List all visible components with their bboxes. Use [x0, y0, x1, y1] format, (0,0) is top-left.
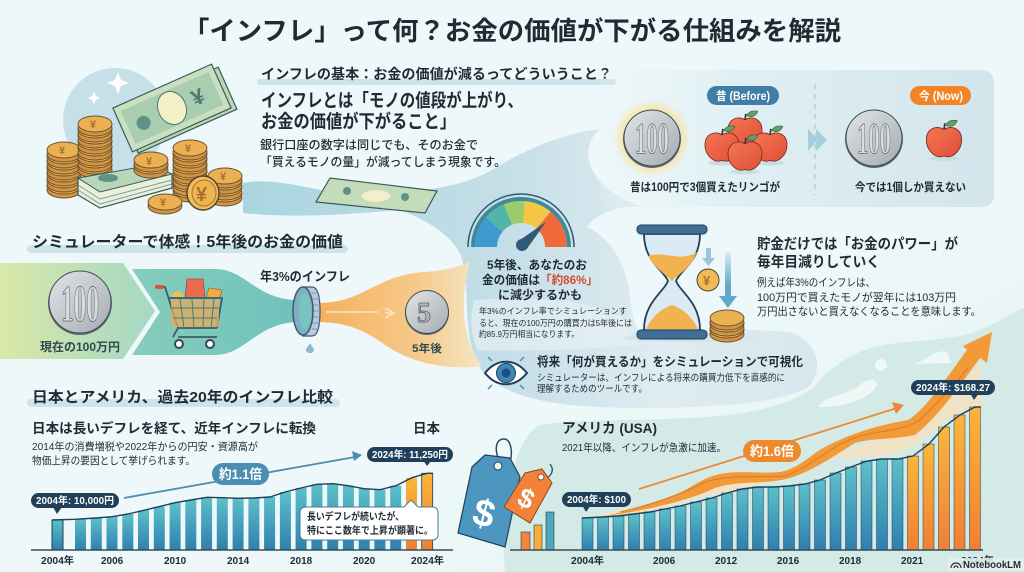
end value label: 2024年: $168.27 — [916, 381, 990, 394]
river of money — [243, 129, 817, 408]
axis labels: 2004年 — [41, 554, 74, 567]
start value label — [31, 493, 119, 514]
coin before: 100 — [635, 114, 669, 163]
callout: 長いデフレが続いたが、 — [307, 510, 404, 523]
label: 3 percent inflation: 年3%のインフレ — [260, 269, 350, 284]
end value label — [911, 380, 995, 400]
illustration: money pile: ¥ — [196, 184, 208, 206]
callout: 特にここ数年で上昇が顕著に。 — [307, 524, 433, 537]
savings text: 万円出さないと買えなくなることを意味します。 — [757, 305, 981, 318]
japan text — [32, 420, 440, 467]
axis labels: 2006 — [101, 556, 124, 567]
icon: shopping cart — [155, 279, 222, 348]
orange band with arrow — [600, 332, 992, 517]
coin 5: 5 — [417, 298, 431, 329]
background: lighter area behind gauge text — [471, 298, 640, 351]
start value label: 2004年: 10,000円 — [36, 494, 114, 507]
callout — [300, 500, 438, 540]
coin now: 100 — [857, 114, 891, 163]
savings text: 毎年目減りしていく — [757, 253, 880, 271]
teal funnel — [132, 269, 295, 355]
arrow — [808, 129, 827, 151]
orange flow — [318, 262, 482, 367]
visualize text: 理解するためのツールです。 — [537, 383, 647, 395]
japan text: 2014年の消費増税や2022年からの円安・資源高が — [32, 440, 258, 453]
icon: price tags and mini bars: $ — [468, 491, 499, 537]
axis — [31, 549, 453, 551]
illustration: money pile: ¥ — [220, 171, 227, 183]
gauge text: 年3%のインフレ率でシミュレーションす — [479, 306, 627, 316]
definition text: お金の価値が下がること」 — [261, 111, 456, 132]
title: 「インフレ」って何？お金の価値が下がる仕組みを解説 — [183, 16, 841, 46]
multiplier pill: 約1.1倍 — [219, 466, 262, 482]
japan text: 日本は長いデフレを経て、近年インフレに転換 — [32, 420, 317, 436]
panel: before and now comparison — [600, 70, 994, 207]
multiplier pill — [212, 463, 269, 485]
illustration: money pile: ¥ — [90, 119, 97, 131]
coin now — [845, 110, 903, 168]
simulator flow — [0, 262, 482, 367]
definition text: インフレとは「モノの値段が上がり、 — [261, 90, 523, 111]
axis labels: 2024年 — [961, 554, 994, 567]
axis labels: 2004年 — [571, 554, 604, 567]
axis labels: 2024年 — [411, 554, 444, 567]
gauge text — [479, 257, 632, 339]
trend line — [52, 473, 433, 520]
trend line — [582, 407, 981, 518]
coin 100: 100 — [61, 276, 99, 333]
gauge: value meter — [468, 194, 574, 251]
icon: price tags and mini bars — [458, 439, 554, 550]
before pill — [707, 86, 779, 105]
axis labels: 2010 — [164, 556, 187, 567]
gauge text: 金の価値は「約86%」 — [482, 272, 598, 287]
coin 5 — [405, 290, 449, 335]
end value label — [367, 447, 453, 466]
now pill: 今 (Now) — [919, 89, 963, 103]
gauge text: に減少するかも — [498, 287, 582, 302]
usa text: 2021年以降、インフレが急激に加速。 — [562, 441, 726, 454]
visualize text — [537, 354, 803, 395]
axis labels: 2020 — [353, 556, 376, 567]
illustration: money pile: ¥ — [185, 143, 192, 155]
pipe ring — [293, 287, 320, 336]
icon: price tags and mini bars: $ — [513, 482, 539, 515]
illustration: money pile: ¥ — [146, 156, 153, 168]
axis — [510, 549, 983, 551]
illustration: money pile: ¥ — [187, 83, 209, 111]
arrow block: present value — [0, 263, 155, 359]
usa text — [562, 420, 726, 454]
axis labels: 2021 — [901, 556, 924, 567]
illustration: money pile: ¥ — [160, 197, 167, 209]
bars — [52, 473, 433, 550]
savings text: 貯金だけでは「お金のパワー」が — [757, 235, 958, 253]
savings text: 100万円で買えたモノが翌年には103万円 — [757, 290, 956, 304]
japan text: 物価上昇の要因として挙げられます。 — [32, 454, 195, 467]
start value label — [562, 492, 631, 512]
before pill: 昔 (Before) — [716, 90, 770, 103]
icon: eye — [485, 357, 527, 389]
divider — [814, 84, 816, 195]
axis labels: 2012 — [715, 556, 738, 567]
water drop — [306, 343, 314, 353]
coin 100 — [48, 271, 112, 335]
gauge text: 約85.9万円相当になります。 — [479, 329, 579, 339]
three apples — [705, 111, 787, 174]
label: present: 現在の100万円 — [40, 339, 120, 354]
definition text: 「買えるモノの量」が減ってしまう現象です。 — [260, 154, 506, 169]
icon: hourglass — [623, 225, 757, 342]
gauge text: 5年後、あなたのお — [487, 257, 587, 272]
one apple — [926, 120, 962, 161]
start value label: 2004年: $100 — [567, 493, 626, 506]
icon: falling coin and arrows: ¥ — [703, 273, 711, 288]
bar chart: japan — [31, 447, 453, 567]
multiplier pill — [743, 440, 801, 462]
beige area under band — [600, 362, 983, 518]
background: cloud swirls — [818, 351, 953, 407]
icon: falling coin and arrows — [697, 248, 744, 342]
axis labels: 2018 — [290, 556, 313, 567]
axis labels: 2018 — [839, 556, 862, 567]
label: after 5 years: 5年後 — [412, 341, 442, 355]
savings text — [757, 235, 981, 318]
visualize text: 将来「何が買えるか」をシミュレーションで可視化 — [537, 354, 803, 369]
section heading: comparison: 日本とアメリカ、過去20年のインフレ比較 — [32, 388, 333, 406]
floating banknote — [316, 178, 437, 213]
section heading: basics: インフレの基本：お金の価値が減るってどういうこと？ — [261, 66, 612, 82]
trend arrow — [639, 408, 897, 489]
illustration: money pile — [47, 64, 242, 214]
trend arrow — [124, 457, 355, 498]
illustration: money pile: ¥ — [59, 145, 66, 157]
caption before: 昔は100円で3個買えたリンゴが — [630, 180, 780, 194]
section heading: simulator: シミュレーターで体感！5年後のお金の価値 — [32, 232, 343, 251]
coin before — [613, 99, 691, 177]
gauge text: ると、現在の100万円の購買力は5年後には — [479, 318, 632, 328]
axis labels — [571, 554, 994, 567]
savings text: 例えば年3%のインフレは、 — [757, 275, 875, 289]
visualize text: シミュレーターは、インフレによる将来の購買力低下を直感的に — [537, 372, 785, 384]
japan text: 日本 — [413, 420, 440, 436]
end value label: 2024年: 11,250円 — [372, 448, 448, 461]
now pill — [910, 86, 971, 105]
bars — [582, 407, 980, 550]
axis labels: 2016 — [777, 556, 800, 567]
chart: usa — [510, 332, 995, 567]
caption now: 今では1個しか買えない — [855, 180, 966, 194]
axis labels: 2006 — [653, 556, 676, 567]
axis labels — [41, 554, 444, 567]
multiplier pill: 約1.6倍 — [750, 443, 794, 459]
background: lower right green wash — [504, 308, 1024, 572]
usa text: アメリカ (USA) — [562, 420, 657, 436]
axis labels: 2014 — [227, 556, 250, 567]
definition text — [260, 90, 523, 169]
definition text: 銀行口座の数字は同じでも、そのお金で — [260, 137, 478, 152]
